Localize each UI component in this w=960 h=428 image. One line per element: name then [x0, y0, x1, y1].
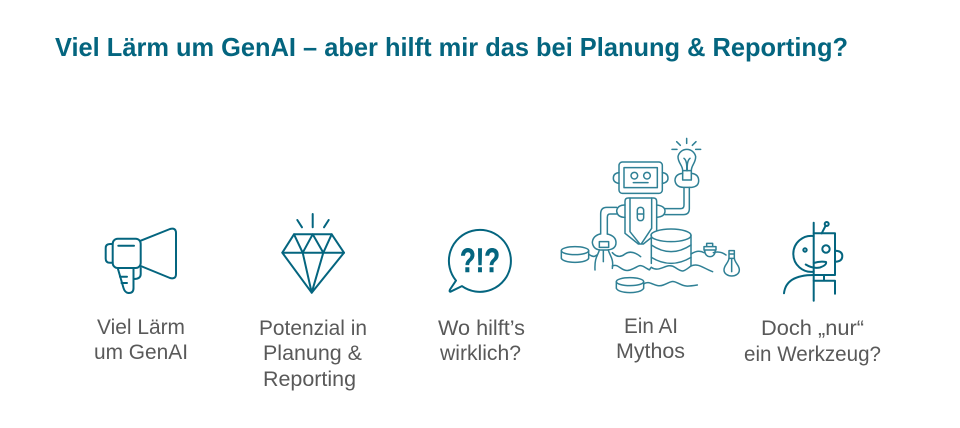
label: Ein AI — [624, 315, 678, 338]
label — [744, 317, 881, 366]
label — [259, 317, 367, 391]
label: Viel Lärm — [97, 316, 185, 339]
label: Doch „nur“ — [761, 317, 864, 340]
icon: megaphone — [106, 229, 176, 293]
panel: Viel Lärm um GenAI — [94, 229, 188, 364]
label: ein Werkzeug? — [744, 343, 881, 366]
panel: Ein AI Mythos — [561, 138, 739, 363]
label: Mythos — [616, 340, 685, 363]
icon: robot with database and light bulbs — [561, 138, 739, 293]
label: Potenzial in — [259, 317, 367, 340]
label: Planung & — [263, 342, 362, 365]
label — [94, 316, 188, 364]
label: Wo hilft’s — [438, 317, 525, 340]
icon: diamond — [282, 214, 344, 293]
label: wirklich? — [439, 342, 521, 365]
panel: Doch nur ein Werkzeug? — [744, 222, 881, 366]
label — [438, 317, 525, 365]
icon: speech bubble: ?!? — [460, 242, 500, 280]
icon: half human half robot face — [784, 222, 842, 301]
label — [616, 315, 685, 363]
panel: Potenzial in Planung & Reporting — [259, 214, 367, 391]
panel: Wo hilft's wirklich? — [438, 230, 525, 365]
label: Reporting — [263, 368, 356, 391]
title: Viel Lärm um GenAI – aber hilft mir das bei Planung & Reporting? — [55, 32, 848, 62]
label: um GenAI — [94, 341, 188, 364]
